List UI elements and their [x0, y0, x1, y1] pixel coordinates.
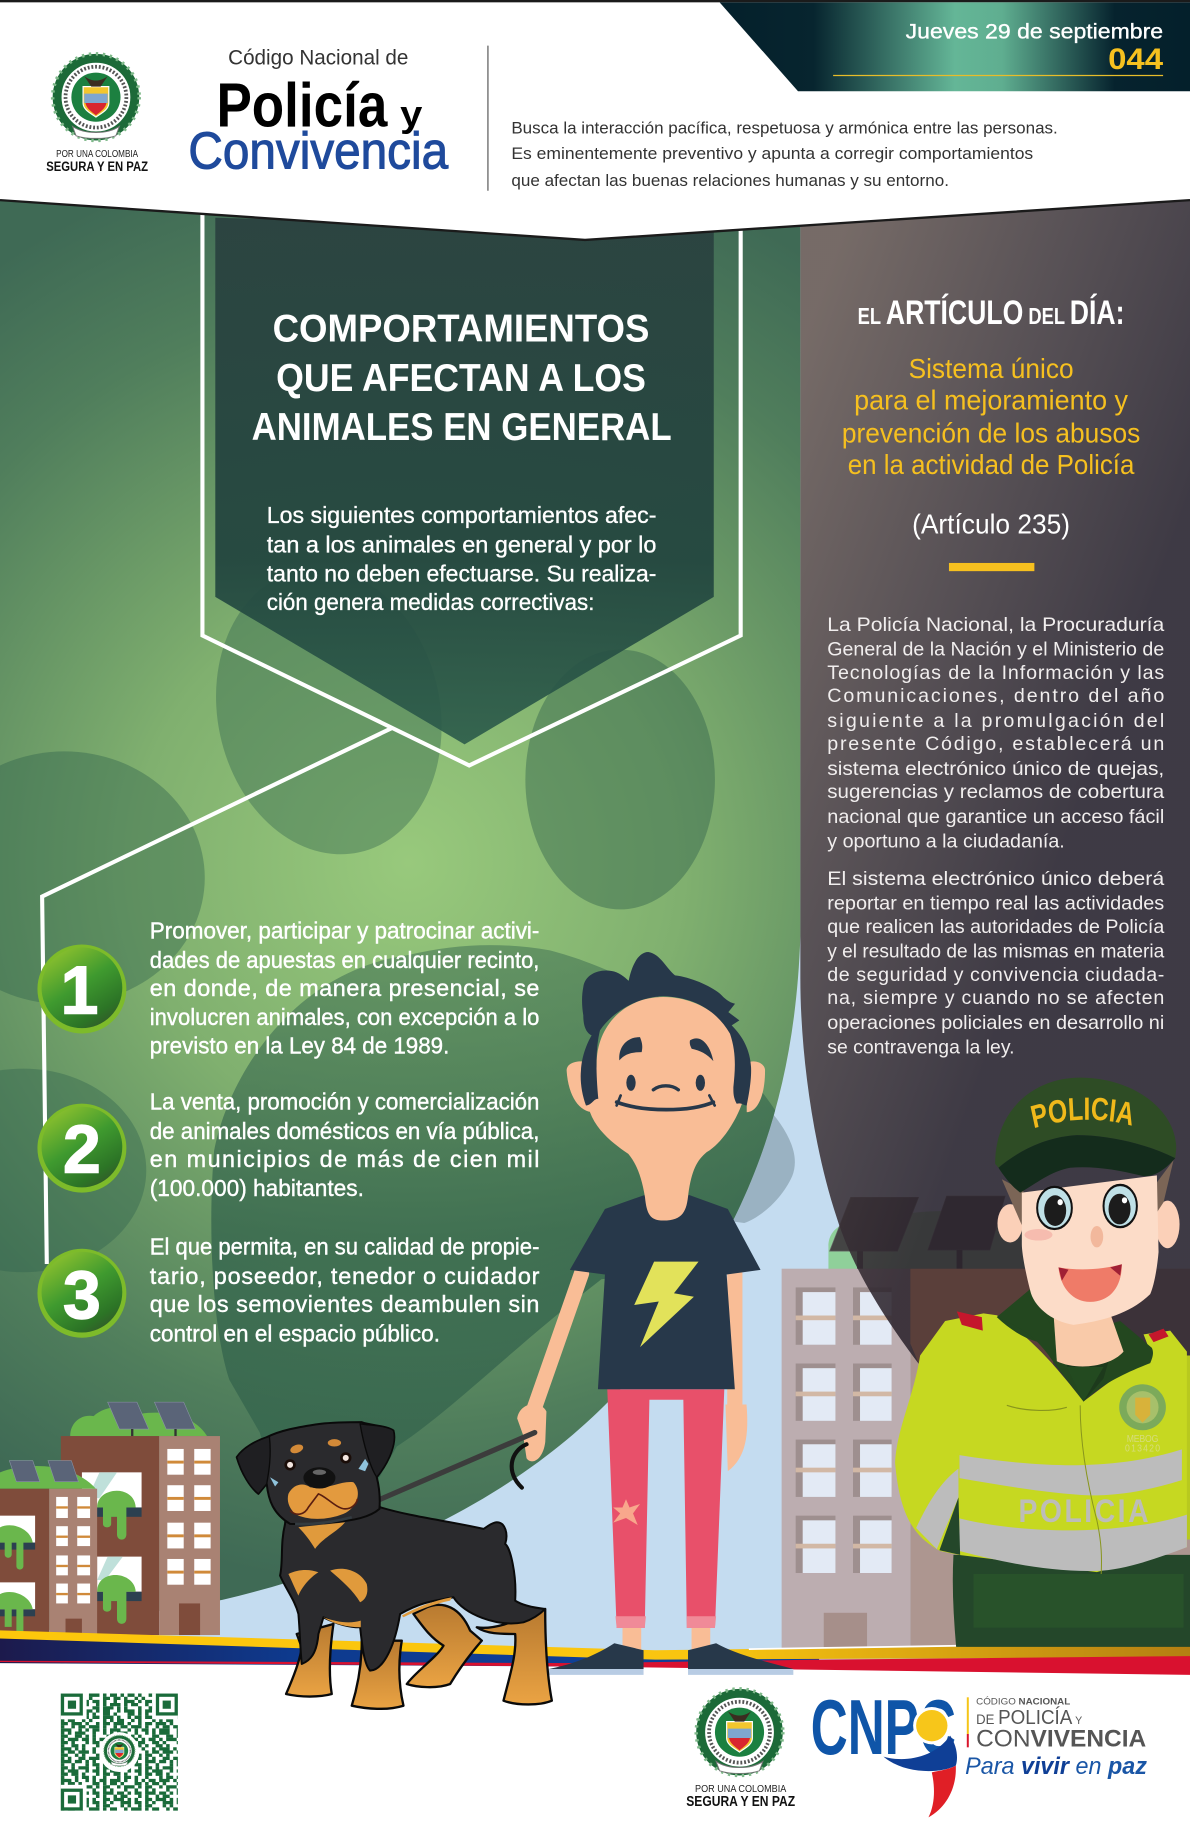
- number badge 3: 3: [63, 1258, 101, 1333]
- article paragraph 1: nacional que garantice un acceso fácil: [827, 806, 1164, 828]
- CNPC logo: CONVIVENCIA: [976, 1726, 1146, 1753]
- number badge 1: 1: [61, 954, 98, 1029]
- article paragraph 1: presente Código, establecerá un: [827, 733, 1164, 755]
- trousers: [953, 1555, 1190, 1647]
- header description: Busca la interacción pacífica, respetuosa y armónica entre las personas.: [511, 118, 1058, 137]
- head: [567, 952, 765, 1221]
- article paragraph 2: na, siempre y cuando no se afecten: [827, 987, 1164, 1009]
- hexagon outline and connector line: [42, 214, 741, 1264]
- police crest logo: POR UNA COLOMBIA: [56, 149, 138, 160]
- illustration: left buildings: [0, 1402, 220, 1635]
- large paw pad: [211, 945, 776, 1479]
- flag band and footer: [0, 1630, 1190, 1834]
- header description: Es eminentemente preventivo y apunta a corregir comportamientos: [511, 144, 1033, 163]
- item 3: tario, poseedor, tenedor o cuidador: [150, 1263, 540, 1289]
- panel: title hexagon: [215, 218, 714, 744]
- code title logo: Código Nacional de: [228, 46, 408, 69]
- item 2: (100.000) habitantes.: [150, 1175, 364, 1201]
- article name: Sistema único: [909, 353, 1074, 384]
- code title logo: Convivencia: [188, 122, 448, 180]
- title: [252, 308, 672, 449]
- eyes: [1037, 1185, 1137, 1229]
- shoulder badge: [1119, 1384, 1166, 1453]
- hair: [581, 952, 751, 1105]
- article paragraph 1: sugerencias y reclamos de cobertura: [827, 781, 1164, 803]
- title: ANIMALES EN GENERAL: [252, 406, 672, 449]
- article paragraph 2: se contravenga la ley.: [827, 1036, 1014, 1058]
- intro text: ción genera medidas correctivas:: [267, 589, 594, 615]
- far arm: [1184, 1356, 1190, 1540]
- shoulder badge: MEBOG: [1127, 1433, 1158, 1444]
- number badge 2: [37, 1104, 126, 1193]
- article paragraph 1: sistema electrónico único de quejas,: [827, 758, 1164, 780]
- shoulder badge: 013420: [1125, 1443, 1160, 1453]
- date block: [720, 2, 1190, 91]
- icon: leash: [380, 1433, 535, 1499]
- item 2: La venta, promoción y comercialización: [150, 1089, 539, 1115]
- CNPC logo: CÓDIGO NACIONAL: [976, 1697, 1071, 1707]
- person face features: [617, 1037, 715, 1110]
- panel: green paw background: [0, 199, 800, 1639]
- police crest logo: [46, 54, 148, 174]
- article paragraph 1: La Policía Nacional, la Procuraduría: [827, 614, 1164, 636]
- shirt lightning bolt: [634, 1262, 699, 1347]
- illustration: police officer: [895, 1078, 1190, 1647]
- item 1: involucren animales, con excepción a lo: [150, 1004, 539, 1030]
- dog body: [280, 1477, 545, 1671]
- illustration: dog: [237, 1422, 552, 1709]
- header description: [511, 118, 1058, 190]
- shaded building wall under panel: [910, 1269, 1053, 1404]
- article paragraph 2: reportar en tiempo real las actividades: [827, 892, 1164, 914]
- article paragraph 2: El sistema electrónico único deberá: [827, 868, 1164, 890]
- CNPC logo: Para vivir en paz: [965, 1753, 1147, 1780]
- CNPC logo: DE POLICÍA Y: [976, 1706, 1083, 1729]
- item 3: [37, 1234, 540, 1346]
- face: [997, 1160, 1180, 1325]
- item 2: en municipios de más de cien mil: [150, 1146, 539, 1172]
- shadow blob over sky: [702, 1088, 795, 1223]
- illustration: right building: [782, 1196, 1190, 1649]
- article paragraph 2: que realicen las autoridades de Policía: [827, 916, 1164, 938]
- number badge 3: [37, 1249, 126, 1338]
- illustration: person: [517, 952, 793, 1675]
- item 3: control en el espacio público.: [150, 1320, 440, 1346]
- article paragraph 2: y el resultado de las mismas en materia: [827, 940, 1164, 962]
- intro text: Los siguientes comportamientos afec-: [267, 502, 656, 528]
- article paragraph 1: y oportuno a la ciudadanía.: [827, 830, 1065, 852]
- date block: Jueves 29 de septiembre: [906, 21, 1163, 44]
- item 1: dades de apuestas en cualquier recinto,: [150, 947, 539, 973]
- jacket text: POLICIA: [1018, 1493, 1149, 1530]
- item 1: Promover, participar y patrocinar activi-: [150, 918, 539, 944]
- footer police crest logo: POR UNA COLOMBIA: [695, 1784, 787, 1795]
- header description: que afectan las buenas relaciones humanas y su entorno.: [511, 171, 949, 190]
- item 1: [37, 918, 539, 1058]
- item 1: previsto en la Ley 84 de 1989.: [150, 1032, 449, 1058]
- title: QUE AFECTAN A LOS: [276, 357, 646, 400]
- jacket: [895, 1313, 1187, 1572]
- code title logo: y: [400, 92, 423, 134]
- footer police crest logo: [686, 1689, 795, 1810]
- code title logo: [188, 46, 448, 180]
- item 1: en donde, de manera presencial, se: [150, 975, 539, 1001]
- title: COMPORTAMIENTOS: [273, 308, 649, 351]
- article paragraph 1: Comunicaciones, dentro del año: [827, 685, 1164, 707]
- article paragraph 1: Tecnologías de la Información y las: [827, 662, 1164, 684]
- item 3: El que permita, en su calidad de propie-: [150, 1234, 539, 1260]
- article name: prevención de los abusos: [842, 417, 1140, 448]
- item 2: de animales domésticos en vía pública,: [150, 1118, 539, 1144]
- article paragraph 1: General de la Nación y el Ministerio de: [827, 638, 1164, 660]
- intro text: tan a los animales en general y por lo: [267, 531, 656, 557]
- code title logo: Policía: [216, 71, 388, 140]
- number badge 2: 2: [63, 1113, 101, 1188]
- intro text: tanto no deben efectuarse. Su realiza-: [267, 561, 656, 587]
- dog head: [237, 1422, 394, 1524]
- number badge 1: [37, 945, 126, 1033]
- article heading: EL ARTÍCULO DEL DÍA:: [858, 294, 1124, 332]
- collar: [997, 1287, 1153, 1402]
- date block: 044: [1108, 44, 1164, 76]
- cap: [995, 1078, 1176, 1193]
- yellow divider: [949, 563, 1034, 571]
- article paragraph 2: operaciones policiales en desarrollo ni: [827, 1012, 1164, 1034]
- sleeve shadow: [939, 1497, 960, 1555]
- dog tan markings: [288, 1522, 452, 1627]
- article name: [842, 353, 1140, 480]
- CNPC logo: CNPC: [811, 1683, 956, 1771]
- icon: qr code: [61, 1692, 178, 1811]
- article paragraph 2: de seguridad y convivencia ciudada-: [827, 964, 1164, 986]
- police crest logo: SEGURA Y EN PAZ: [46, 158, 148, 174]
- item 3: que los semovientes deambulen sin: [150, 1291, 539, 1317]
- article name: para el mejoramiento y: [854, 385, 1128, 416]
- cap text: [1033, 1120, 1134, 1129]
- article paragraph 1: siguiente a la promulgación del: [827, 710, 1164, 732]
- header: [0, 0, 1190, 240]
- CNPC logo: [811, 1683, 1147, 1817]
- intro text: [267, 502, 656, 615]
- panel: article of the day background: [800, 199, 1190, 1522]
- article number: (Artículo 235): [912, 509, 1070, 540]
- dog face: [270, 1439, 368, 1519]
- article paragraph 1: [827, 614, 1164, 852]
- footer police crest logo: SEGURA Y EN PAZ: [686, 1794, 795, 1810]
- cap: POLICIA: [1030, 1098, 1132, 1128]
- article name: en la actividad de Policía: [848, 449, 1135, 480]
- dog legs: [286, 1605, 552, 1709]
- article paragraph 2: [827, 868, 1164, 1058]
- item 2: [37, 1089, 539, 1201]
- jacket reflective bands: [916, 1449, 1187, 1571]
